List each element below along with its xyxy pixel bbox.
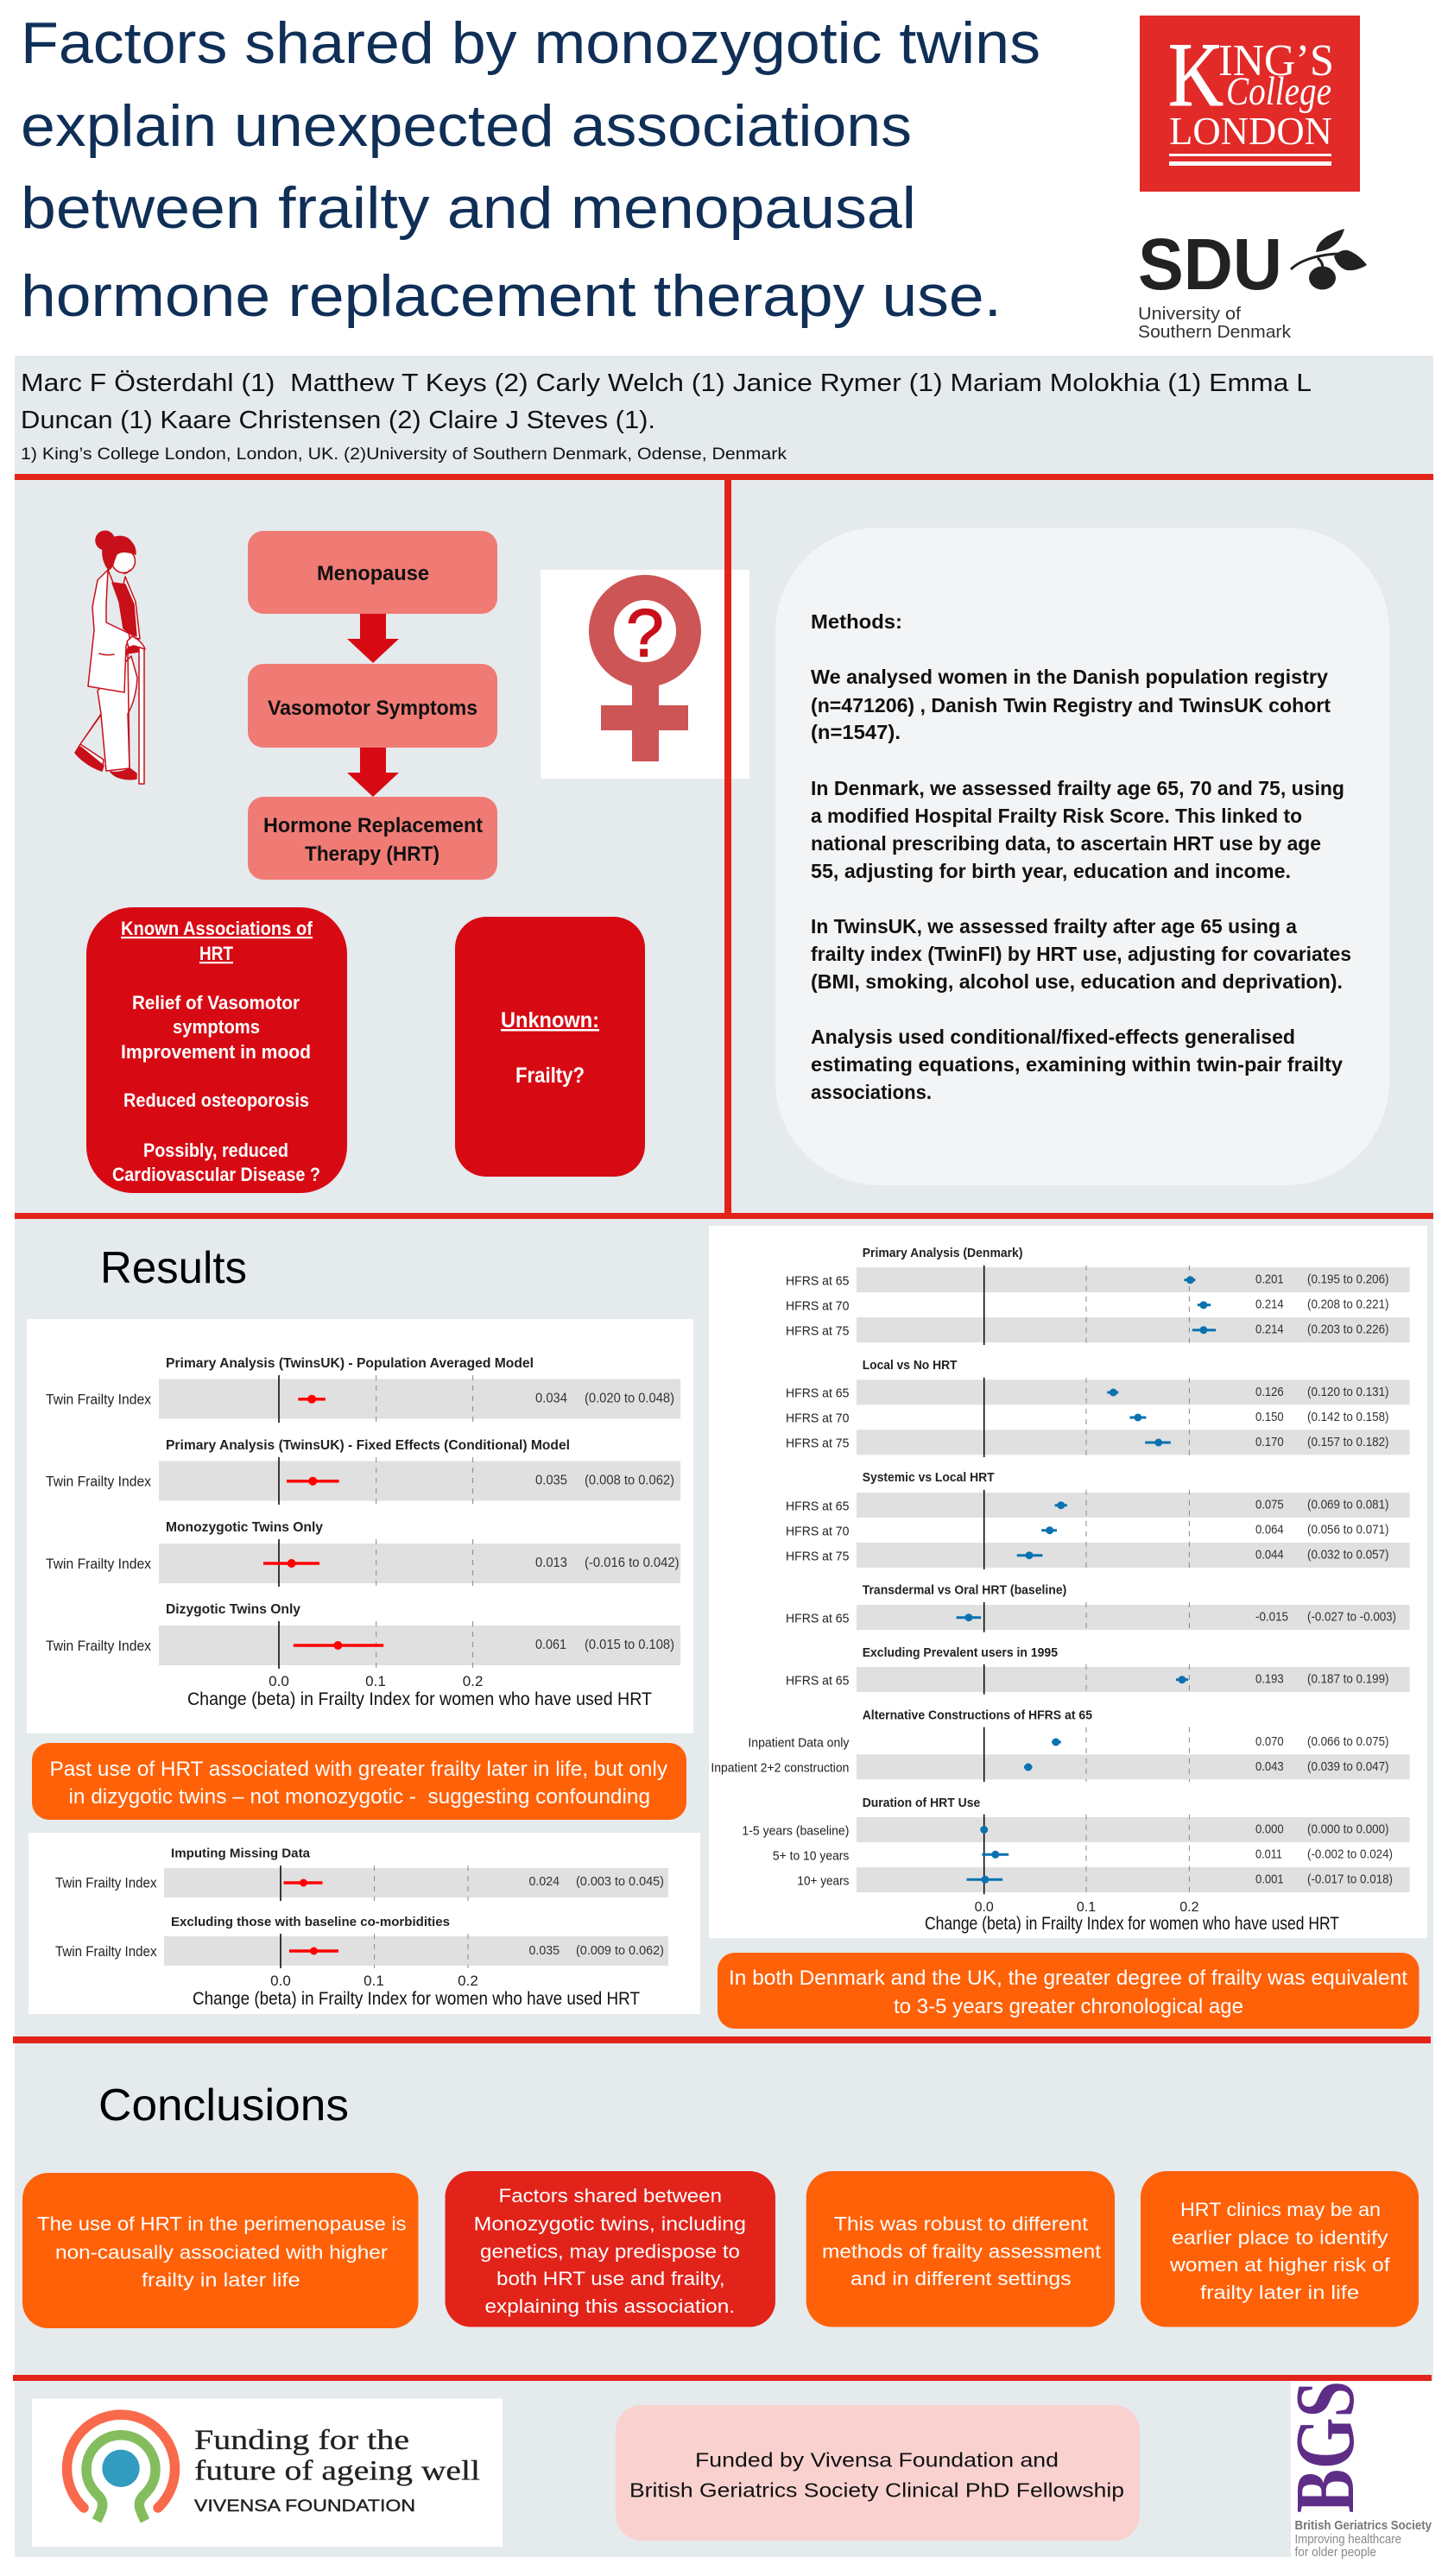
panel: known associations of HRT: Known Associations of — [121, 918, 313, 939]
logo: University of Southern Denmark: University of — [1138, 305, 1241, 324]
panel: known associations of HRT: symptoms — [173, 1016, 260, 1038]
row: fixed effects model: Primary Analysis (TwinsUK) - Fixed Effects (Conditional) Model — [166, 1438, 570, 1453]
heading: Conclusions: Conclusions — [98, 2080, 349, 2131]
authors and affiliations — [21, 369, 1312, 464]
conclusion box: non-causal association: frailty in later life — [142, 2269, 300, 2291]
flow box: Vasomotor Symptoms — [248, 664, 497, 748]
x axis: chart 2: 0.0 — [270, 1973, 291, 1989]
section: systemic vs local HRT: (0.056 to 0.071) — [1307, 1523, 1388, 1537]
row: population averaged model: Primary Analysis (TwinsUK) - Population Averaged Model — [166, 1356, 534, 1371]
callout: Denmark and UK equivalence: In both Denmark and the UK, the greater degree of frailty was equivalent — [729, 1967, 1407, 1990]
row: excluding baseline co-morbidities: Excluding those with baseline co-morbidities — [171, 1916, 450, 1929]
row: dizygotic twins only: (0.015 to 0.108) — [585, 1638, 674, 1652]
logo: King's College London: ING’S — [1218, 36, 1334, 85]
section: systemic vs local HRT: HFRS at 70 — [786, 1524, 849, 1538]
row: dizygotic twins only — [46, 1602, 680, 1669]
callout: dizygotic twins finding: in dizygotic twins – not monozygotic - suggesting confounding — [69, 1785, 650, 1809]
x axis: chart 1 — [187, 1673, 652, 1709]
flow diagram: menopause pathway — [248, 531, 497, 880]
row: dizygotic twins only: Twin Frailty Index — [46, 1638, 152, 1654]
x axis: chart 3: 0.0 — [975, 1900, 994, 1915]
panel: methods: Analysis used conditional/fixed-effects generalised — [811, 1026, 1295, 1048]
x axis: chart 2: 0.2 — [458, 1973, 478, 1989]
logo: King's College London: College — [1226, 69, 1331, 114]
panel: methods — [775, 527, 1389, 1185]
logo: University of Southern Denmark — [1138, 224, 1367, 342]
x axis: chart 2: Change (beta) in Frailty Index for women who have used HRT — [193, 1989, 640, 2009]
icon: older woman walking with cane — [75, 531, 145, 784]
section: primary analysis Denmark: (0.195 to 0.206) — [1307, 1272, 1388, 1287]
logo: King's College London — [1140, 16, 1360, 192]
x axis: chart 3: 0.2 — [1179, 1900, 1199, 1915]
conclusion box: non-causal association — [22, 2173, 418, 2328]
section: local vs no HRT: Local vs No HRT — [863, 1359, 958, 1373]
section: transdermal vs oral HRT — [786, 1584, 1410, 1632]
flow box: Hormone Replacement Therapy: Hormone Replacement — [263, 814, 483, 837]
row: monozygotic twins only: (-0.016 to 0.042) — [585, 1556, 680, 1570]
flow box: Vasomotor Symptoms: Vasomotor Symptoms — [268, 697, 477, 720]
section: alternative constructions — [711, 1709, 1410, 1782]
section: systemic vs local HRT — [786, 1471, 1410, 1569]
panel: known associations of HRT: HRT — [199, 943, 233, 964]
logo: University of Southern Denmark: SDU — [1138, 224, 1282, 305]
authors and affiliations: 1) King’s College London, London, UK. (2)University of Southern Denmark, Odense, Denmark — [21, 445, 787, 464]
section: systemic vs local HRT: 0.075 — [1255, 1498, 1284, 1512]
panel: known associations of HRT — [86, 907, 347, 1193]
section: primary analysis Denmark: (0.208 to 0.221) — [1307, 1297, 1388, 1312]
panel: known associations of HRT: Possibly, reduced — [143, 1140, 288, 1161]
conclusion box: non-causal association: The use of HRT in the perimenopause is — [37, 2213, 407, 2235]
chart: TwinsUK primary forest plot — [27, 1319, 693, 1733]
x axis: chart 1: 0.2 — [463, 1673, 483, 1689]
section: systemic vs local HRT: 0.044 — [1255, 1548, 1284, 1563]
row: monozygotic twins only: Monozygotic Twins Only — [166, 1520, 323, 1535]
panel: methods: (BMI, smoking, alcohol use, education and deprivation). — [811, 970, 1343, 993]
row: fixed effects model: 0.035 — [535, 1473, 567, 1488]
x axis: chart 3: Change (beta) in Frailty Index for women who have used HRT — [925, 1914, 1339, 1934]
panel: unknown frailty: Unknown: — [501, 1008, 599, 1032]
arrow: Menopause to Vasomotor Symptoms — [347, 614, 399, 663]
section: excluding prevalent users: (0.187 to 0.199) — [1307, 1672, 1388, 1687]
panel: methods: In TwinsUK, we assessed frailty after age 65 using a — [811, 915, 1297, 938]
icon: female symbol with question mark — [589, 575, 701, 761]
panel: methods: national prescribing data, to ascertain HRT use by age — [811, 832, 1321, 855]
logo: Vivensa Foundation — [32, 2398, 503, 2547]
x axis: chart 1: 0.0 — [269, 1673, 289, 1689]
section: systemic vs local HRT: (0.069 to 0.081) — [1307, 1498, 1388, 1512]
row: dizygotic twins only: Dizygotic Twins Only — [166, 1602, 300, 1617]
x axis: chart 2 — [193, 1973, 640, 2009]
panel: methods: estimating equations, examining within twin-pair frailty — [811, 1053, 1343, 1076]
section: primary analysis Denmark: (0.203 to 0.226) — [1307, 1323, 1388, 1337]
x axis: chart 1: 0.1 — [365, 1673, 386, 1689]
section: duration of HRT use: 0.000 — [1255, 1822, 1284, 1837]
section: alternative constructions: Alternative Constructions of HFRS at 65 — [863, 1709, 1092, 1723]
chart: Denmark forest plot — [709, 1226, 1427, 1938]
logo: King's College London: LONDON — [1169, 110, 1332, 153]
authors and affiliations: Marc F Österdahl (1) Matthew T Keys (2) Carly Welch (1) Janice Rymer (1) Mariam Molokhia (1) Emma L — [21, 369, 1312, 397]
section: duration of HRT use: 5+ to 10 years — [773, 1848, 849, 1863]
row: fixed effects model — [46, 1438, 680, 1505]
logo: University of Southern Denmark: Southern Denmark — [1138, 323, 1292, 342]
section: systemic vs local HRT: 0.064 — [1255, 1523, 1284, 1537]
logo: British Geriatrics Society: Improving healthcare — [1295, 2532, 1401, 2547]
row: monozygotic twins only: 0.013 — [535, 1556, 567, 1570]
panel: methods: (n=1547). — [811, 721, 901, 743]
x axis: chart 2: 0.1 — [364, 1973, 384, 1989]
panel: methods: Methods: — [811, 610, 902, 633]
conclusion box: HRT clinics: frailty later in life — [1200, 2282, 1359, 2303]
section: primary analysis Denmark: Primary Analysis (Denmark) — [863, 1247, 1023, 1260]
panel: unknown frailty: Frailty? — [515, 1064, 585, 1088]
logo: British Geriatrics Society — [1279, 2381, 1433, 2560]
title: Factors shared by monozygotic twins — [21, 10, 1040, 76]
row: dizygotic twins only: 0.061 — [535, 1638, 566, 1652]
section: primary analysis Denmark: HFRS at 65 — [786, 1273, 849, 1288]
row: population averaged model: Twin Frailty Index — [46, 1392, 152, 1407]
conclusion box: robustness: methods of frailty assessment — [822, 2241, 1101, 2262]
logo: Vivensa Foundation: Funding for the — [194, 2425, 409, 2456]
logo: King's College London: K — [1168, 24, 1224, 125]
icon: female symbol with question mark: ? — [626, 595, 664, 671]
section: excluding prevalent users: 0.193 — [1255, 1672, 1284, 1687]
panel: methods: In Denmark, we assessed frailty age 65, 70 and 75, using — [811, 777, 1344, 799]
section: alternative constructions: Inpatient 2+2 construction — [711, 1760, 849, 1775]
section: duration of HRT use: Duration of HRT Use — [863, 1796, 980, 1810]
section: local vs no HRT: (0.120 to 0.131) — [1307, 1385, 1388, 1399]
row: monozygotic twins only — [46, 1520, 680, 1587]
panel: methods: associations. — [811, 1081, 932, 1103]
section: duration of HRT use: (0.000 to 0.000) — [1307, 1822, 1388, 1837]
callout: Denmark and UK equivalence: to 3-5 years greater chronological age — [894, 1995, 1243, 2018]
flow box: Menopause — [248, 531, 497, 614]
funding statement: Funded by Vivensa Foundation and — [695, 2448, 1059, 2471]
panel: methods: 55, adjusting for birth year, education and income. — [811, 860, 1291, 882]
section: duration of HRT use: 10+ years — [797, 1873, 849, 1888]
title: explain unexpected associations — [21, 93, 912, 159]
section: primary analysis Denmark: 0.214 — [1255, 1323, 1284, 1337]
section: local vs no HRT: HFRS at 70 — [786, 1411, 849, 1426]
flow box: Menopause: Menopause — [317, 562, 429, 585]
row: fixed effects model: (0.008 to 0.062) — [585, 1473, 674, 1488]
conclusion box: shared factors: genetics, may predispose to — [480, 2241, 740, 2262]
section: primary analysis Denmark — [786, 1247, 1410, 1345]
logo: British Geriatrics Society: for older people — [1295, 2545, 1376, 2560]
section: alternative constructions: (0.039 to 0.047) — [1307, 1759, 1388, 1774]
heading: Results: Results — [100, 1243, 247, 1293]
row: population averaged model: (0.020 to 0.048) — [585, 1392, 674, 1405]
icon: white box behind female symbol — [541, 570, 749, 779]
conclusion box: shared factors — [446, 2171, 775, 2327]
conclusion box: HRT clinics: HRT clinics may be an — [1180, 2199, 1381, 2220]
section: excluding prevalent users: Excluding Prevalent users in 1995 — [863, 1646, 1058, 1660]
section: alternative constructions: Inpatient Data only — [748, 1735, 850, 1750]
panel: unknown frailty — [455, 917, 645, 1177]
authors and affiliations: Duncan (1) Kaare Christensen (2) Claire J Steves (1). — [21, 407, 655, 434]
row: monozygotic twins only: Twin Frailty Index — [46, 1556, 152, 1572]
callout: dizygotic twins finding: Past use of HRT associated with greater frailty later in life, but only — [50, 1758, 667, 1781]
conclusion box: non-causal association: non-causally associated with higher — [55, 2242, 388, 2263]
conclusion box: robustness — [806, 2171, 1115, 2327]
title: between frailty and menopausal — [21, 175, 916, 241]
section: primary analysis Denmark: 0.214 — [1255, 1297, 1284, 1312]
funding statement — [616, 2405, 1140, 2541]
conclusion box: shared factors: explaining this association. — [485, 2295, 735, 2317]
callout: Denmark and UK equivalence — [718, 1953, 1420, 2029]
row: imputing missing data: (0.003 to 0.045) — [576, 1874, 664, 1889]
section: duration of HRT use — [742, 1796, 1410, 1894]
section: duration of HRT use: 0.011 — [1255, 1847, 1282, 1862]
x axis: chart 3 — [925, 1900, 1339, 1934]
section: local vs no HRT: 0.126 — [1255, 1385, 1284, 1399]
conclusion box: robustness: and in different settings — [850, 2268, 1072, 2289]
conclusion box: HRT clinics: women at higher risk of — [1169, 2254, 1391, 2276]
section: systemic vs local HRT: (0.032 to 0.057) — [1307, 1548, 1388, 1563]
chart: TwinsUK sensitivity forest plot — [28, 1833, 700, 2014]
panel: methods: frailty index (TwinFI) by HRT use, adjusting for covariates — [811, 943, 1351, 965]
section: transdermal vs oral HRT: Transdermal vs Oral HRT (baseline) — [863, 1584, 1066, 1598]
logo: Vivensa Foundation: VIVENSA FOUNDATION — [194, 2497, 415, 2516]
section: systemic vs local HRT: HFRS at 75 — [786, 1549, 849, 1563]
section: duration of HRT use: (-0.017 to 0.018) — [1307, 1872, 1393, 1887]
x axis: chart 1: Change (beta) in Frailty Index for women who have used HRT — [187, 1689, 652, 1709]
panel: methods: (n=471206) , Danish Twin Registry and TwinsUK cohort — [811, 694, 1331, 717]
conclusion box: shared factors: Monozygotic twins, including — [474, 2213, 746, 2235]
callout: dizygotic twins finding — [32, 1743, 686, 1820]
section: primary analysis Denmark: 0.201 — [1255, 1272, 1284, 1287]
section: transdermal vs oral HRT: -0.015 — [1255, 1610, 1288, 1625]
section: excluding prevalent users — [786, 1646, 1410, 1695]
funding statement: British Geriatrics Society Clinical PhD Fellowship — [629, 2478, 1124, 2501]
section: alternative constructions: 0.043 — [1255, 1759, 1284, 1774]
panel: known associations of HRT: Reduced osteoporosis — [123, 1089, 309, 1111]
row: imputing missing data: 0.024 — [528, 1874, 560, 1889]
logo: Vivensa Foundation: future of ageing well — [194, 2455, 480, 2486]
panel: methods: a modified Hospital Frailty Risk Score. This linked to — [811, 805, 1302, 827]
section: duration of HRT use: (-0.002 to 0.024) — [1307, 1847, 1393, 1862]
section: local vs no HRT: HFRS at 75 — [786, 1436, 849, 1451]
section: primary analysis Denmark: HFRS at 70 — [786, 1298, 849, 1313]
section divider lines — [13, 474, 1433, 2381]
row: population averaged model: 0.034 — [535, 1392, 567, 1405]
section: transdermal vs oral HRT: HFRS at 65 — [786, 1611, 849, 1626]
panel: known associations of HRT: Relief of Vasomotor — [132, 992, 300, 1013]
conclusion box: robustness: This was robust to different — [834, 2213, 1088, 2235]
section: primary analysis Denmark: HFRS at 75 — [786, 1323, 849, 1338]
row: population averaged model — [46, 1356, 680, 1423]
conclusion box: shared factors: both HRT use and frailty, — [496, 2268, 725, 2289]
logo: British Geriatrics Society: British Geriatrics Society — [1295, 2518, 1432, 2533]
section: local vs no HRT: HFRS at 65 — [786, 1386, 849, 1401]
section: systemic vs local HRT: Systemic vs Local HRT — [863, 1471, 995, 1485]
row: excluding baseline co-morbidities: (0.009 to 0.062) — [576, 1943, 664, 1958]
conclusion box: HRT clinics — [1141, 2171, 1419, 2327]
flow box: Hormone Replacement Therapy — [248, 797, 497, 880]
row: fixed effects model: Twin Frailty Index — [46, 1474, 152, 1490]
section: duration of HRT use: 1-5 years (baseline) — [742, 1823, 849, 1838]
section: transdermal vs oral HRT: (-0.027 to -0.003) — [1307, 1610, 1396, 1625]
flow box: Hormone Replacement Therapy: Therapy (HRT) — [305, 843, 439, 866]
conclusion box: HRT clinics: earlier place to identify — [1172, 2227, 1388, 2248]
row: imputing missing data: Twin Frailty Index — [55, 1876, 157, 1891]
logo: British Geriatrics Society: BGS — [1279, 2381, 1372, 2513]
title — [21, 10, 1040, 329]
row: imputing missing data — [55, 1847, 668, 1901]
section: alternative constructions: (0.066 to 0.075) — [1307, 1734, 1388, 1749]
section: local vs no HRT: (0.142 to 0.158) — [1307, 1410, 1388, 1424]
panel: known associations of HRT: Cardiovascular Disease ? — [112, 1164, 320, 1185]
panel: methods: We analysed women in the Danish population registry — [811, 666, 1328, 688]
section: duration of HRT use: 0.001 — [1255, 1872, 1284, 1887]
section: systemic vs local HRT: HFRS at 65 — [786, 1499, 849, 1513]
row: excluding baseline co-morbidities: Twin Frailty Index — [55, 1944, 157, 1960]
row: imputing missing data: Imputing Missing Data — [171, 1847, 311, 1861]
conclusion box: shared factors: Factors shared between — [499, 2185, 722, 2207]
section: local vs no HRT: 0.150 — [1255, 1410, 1284, 1424]
row: excluding baseline co-morbidities: 0.035 — [528, 1943, 560, 1958]
row: excluding baseline co-morbidities — [55, 1916, 668, 1968]
section: alternative constructions: 0.070 — [1255, 1734, 1284, 1749]
x axis: chart 3: 0.1 — [1077, 1900, 1096, 1915]
section: local vs no HRT — [786, 1359, 1410, 1457]
arrow: Vasomotor Symptoms to HRT — [347, 748, 399, 797]
section: local vs no HRT: 0.170 — [1255, 1435, 1284, 1449]
section: local vs no HRT: (0.157 to 0.182) — [1307, 1435, 1388, 1449]
section: excluding prevalent users: HFRS at 65 — [786, 1673, 849, 1688]
panel: known associations of HRT: Improvement in mood — [121, 1041, 311, 1063]
title: hormone replacement therapy use. — [21, 263, 1002, 329]
